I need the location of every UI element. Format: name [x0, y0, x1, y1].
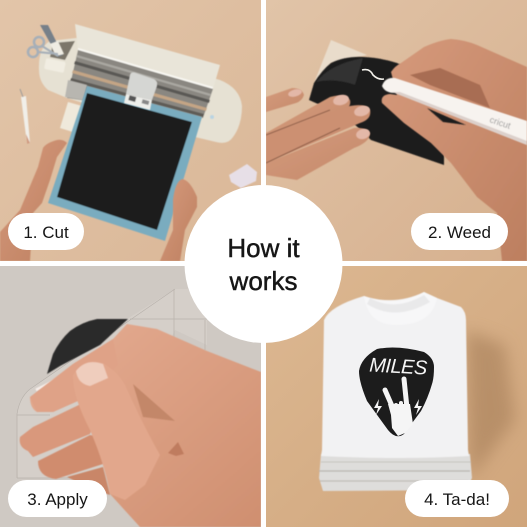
panel: step 4 ta-da	[266, 266, 527, 527]
label: 1. Cut	[8, 213, 84, 250]
label: 4. Ta-da!: 4. Ta-da!	[424, 490, 490, 509]
icon: transfer film	[17, 289, 207, 480]
icon: weeding pen	[382, 78, 527, 145]
icon: weeded vinyl strand	[362, 70, 384, 79]
icon: guitar pick graphic	[359, 348, 434, 436]
shadow of the shirt stack	[466, 330, 515, 480]
icon: right lightning bolt	[414, 399, 422, 415]
icon: lilac accessory	[229, 164, 257, 188]
icon: transfer grid	[16, 289, 207, 478]
panel: step 2 weed	[266, 0, 527, 261]
icon: scissors and tools	[28, 25, 64, 57]
icon: hand	[20, 324, 261, 527]
panel: step 1 cut	[0, 0, 261, 261]
label: 3. Apply: 3. Apply	[27, 490, 88, 509]
icon: right hand	[160, 179, 197, 261]
icon: weeding tool	[20, 89, 30, 144]
heading: How it	[227, 233, 300, 263]
icon: right hand	[382, 39, 527, 261]
icon: left hand	[0, 140, 67, 261]
label: 2. Weed: 2. Weed	[428, 223, 491, 242]
icon: cutting machine	[39, 24, 242, 143]
icon: fingernails left	[287, 88, 371, 141]
centre circle: how it works	[184, 185, 342, 343]
icon: black vinyl	[308, 56, 445, 166]
label: 3. Apply	[8, 480, 107, 517]
icon: stack of folded t-shirts	[319, 292, 472, 491]
heading second line: works	[229, 266, 297, 296]
icon: black vinyl	[47, 319, 128, 374]
icon: left hand fingers	[266, 88, 370, 180]
icon: film highlight	[36, 381, 50, 391]
icon: weeding pen: cricut	[488, 114, 512, 131]
icon: rock hand	[385, 379, 407, 412]
icon: black vinyl wedge below pen	[427, 108, 466, 125]
label: 4. Ta-da!	[405, 480, 509, 517]
icon: transfer liner	[314, 40, 367, 83]
text: MILES: MILES	[369, 355, 429, 380]
label: 1. Cut: 1. Cut	[23, 223, 69, 242]
icon: left lightning bolt	[374, 399, 382, 415]
icon: transfer sheet	[60, 102, 82, 133]
icon: cutting mat with black vinyl	[48, 86, 202, 241]
icon: shadow between fingers	[410, 68, 490, 108]
panel: step 3 apply	[0, 266, 261, 527]
label: 2. Weed	[411, 213, 508, 250]
icon: machine carriage	[124, 72, 157, 110]
